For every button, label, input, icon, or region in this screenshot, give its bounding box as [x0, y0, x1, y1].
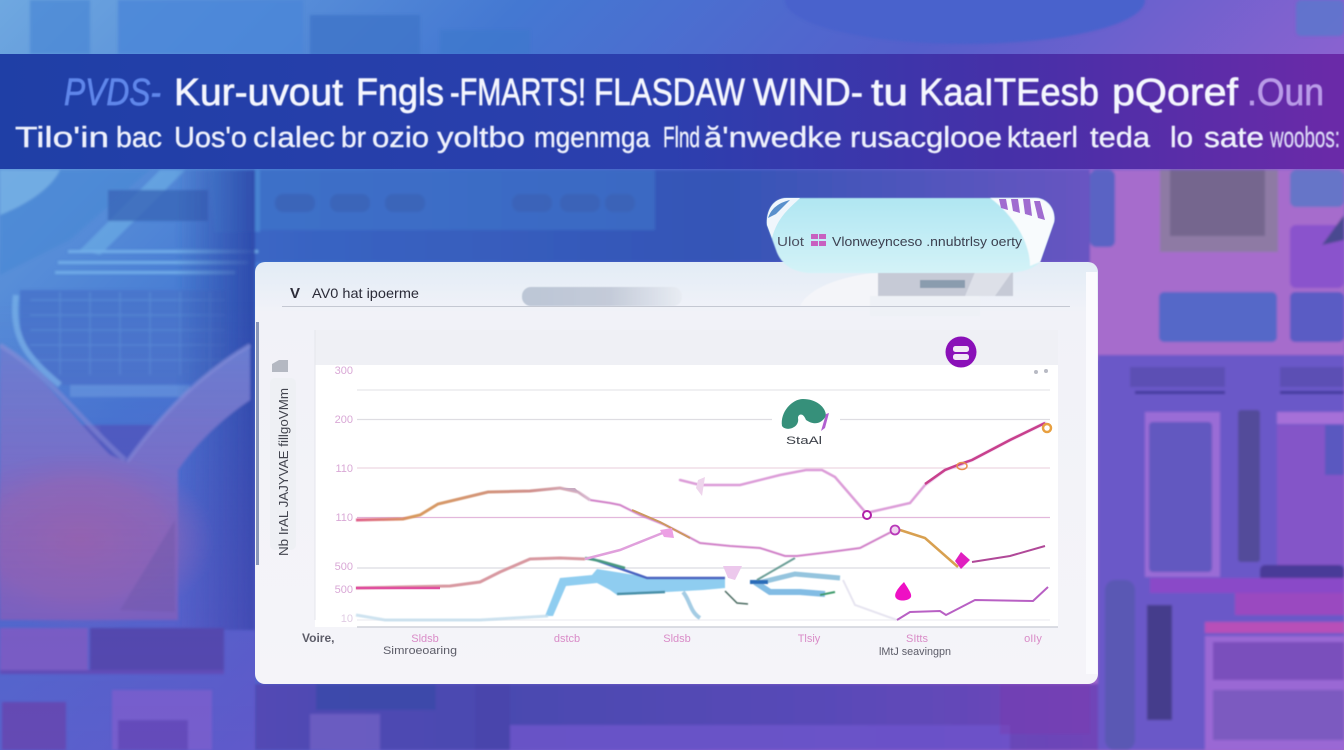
axis captions: Simroeoaring — [383, 645, 457, 657]
card right highlight — [1086, 272, 1097, 674]
title: pQoref — [1112, 72, 1238, 114]
left vertical label tab: Nb IrAL JAJYVAE fillgoVMm — [276, 388, 291, 556]
title: .Oun — [1247, 72, 1324, 114]
marker: orange ring — [957, 462, 967, 470]
marker: circle on mid line — [890, 526, 900, 534]
series: orange upper line — [356, 488, 590, 520]
left vertical label tab — [270, 360, 296, 556]
y axis labels: 10 — [341, 613, 353, 625]
pink blob markers — [560, 477, 742, 580]
right side — [1090, 170, 1344, 360]
icon: purple circle badge — [946, 336, 976, 368]
axis captions: lMtJ seavingpn — [879, 646, 951, 658]
callout text: Ulot — [777, 234, 804, 249]
y axis labels: 300 — [335, 365, 353, 377]
subtitle: br — [341, 122, 366, 154]
title: PVDS- — [64, 72, 161, 114]
marker: orange end — [1043, 424, 1051, 432]
subtitle: Flnd — [663, 122, 700, 154]
series: middle pink line — [590, 500, 895, 556]
y axis labels — [335, 365, 353, 625]
callout legend swatch — [811, 234, 826, 246]
x axis labels — [411, 633, 1042, 645]
segment: magenta lower-left — [356, 587, 440, 589]
subtitle: Uos'o — [174, 122, 247, 154]
subtitle: rusacglooe — [850, 122, 1002, 154]
series: bottom purple line — [897, 587, 1048, 620]
small corner dots — [1034, 369, 1048, 374]
callout description: Vlonweynceso .nnubtrlsy oerty — [832, 234, 1023, 249]
series: pink top line — [680, 423, 1045, 513]
card heading: AV0 hat ipoerme — [312, 285, 419, 301]
subtitle: yoltbo — [437, 122, 525, 154]
icon: green badge with label — [781, 398, 829, 447]
subtitle: ă'nwedke — [704, 122, 842, 154]
subtitle: bac — [116, 122, 162, 154]
series: right orange descent — [900, 530, 958, 567]
title: Fngls — [356, 72, 444, 114]
title: -FMARTS! — [450, 72, 586, 114]
y axis labels: 110 — [335, 512, 353, 524]
header grey pill — [522, 287, 682, 306]
x axis labels: Sldsb — [663, 633, 691, 645]
series: lower orange line — [356, 558, 585, 588]
marker: circle at low point — [863, 511, 871, 519]
subtitle — [15, 122, 1340, 154]
title: tu — [871, 72, 908, 114]
x axis labels: oIIy — [1024, 633, 1042, 645]
icon: magenta drop — [895, 582, 911, 601]
subtitle: ktaerl — [1007, 122, 1078, 154]
lower blue series — [356, 558, 897, 620]
callout bubble — [767, 198, 1054, 273]
axis captions — [302, 631, 951, 658]
segment: rising pink — [585, 532, 665, 559]
title: WIND- — [753, 72, 863, 114]
y axis labels: 110 — [335, 463, 353, 475]
title — [64, 72, 1324, 114]
subtitle: mgenmga — [534, 122, 651, 154]
title: Kur-uvout — [174, 72, 343, 114]
card heading: V — [290, 285, 300, 302]
chart panel — [302, 330, 1058, 658]
chart card — [255, 198, 1098, 684]
subtitle: sate — [1204, 122, 1264, 154]
y axis labels: 200 — [335, 414, 353, 426]
x axis labels: dstcb — [554, 633, 580, 645]
subtitle: teda — [1090, 122, 1151, 154]
subtitle: lo — [1170, 122, 1193, 154]
card left accent bar — [256, 322, 259, 565]
callout purple stripes — [999, 199, 1045, 220]
x axis labels: Sldsb — [411, 633, 439, 645]
title: KaaITEesb — [919, 72, 1099, 114]
y axis labels: 500 — [335, 561, 353, 573]
accent: rising red segment — [925, 423, 1045, 484]
axis captions: Voire, — [302, 631, 334, 645]
subtitle: Tilo'in — [15, 122, 109, 154]
y axis labels: 500 — [335, 584, 353, 596]
callout base device — [800, 272, 1013, 316]
icon: green badge with label: StaAl — [786, 435, 822, 447]
x axis labels: Tlsiy — [798, 633, 821, 645]
subtitle: cIalec — [253, 122, 335, 154]
top banner — [0, 54, 1344, 169]
gridlines — [357, 390, 1058, 627]
x axis labels: SItts — [906, 633, 928, 645]
subtitle: ozio — [372, 122, 429, 154]
marker: magenta diamond — [955, 552, 970, 569]
title: FLASDAW — [594, 72, 745, 114]
series: right magenta tail — [972, 546, 1045, 562]
segment: orange descent — [632, 510, 690, 538]
